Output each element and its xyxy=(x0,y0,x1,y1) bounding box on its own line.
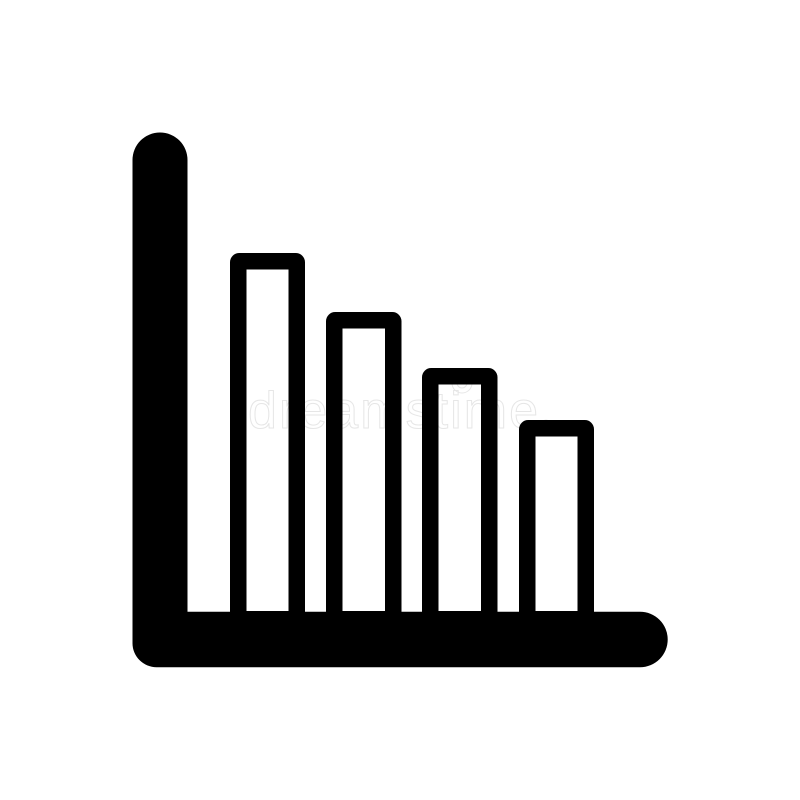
bar 2 xyxy=(334,320,393,619)
bar 4 xyxy=(527,428,586,619)
watermark: dreamstime xyxy=(248,382,538,440)
chart axes xyxy=(132,132,668,667)
bar 3 xyxy=(430,376,489,619)
bar 1 xyxy=(238,261,297,619)
